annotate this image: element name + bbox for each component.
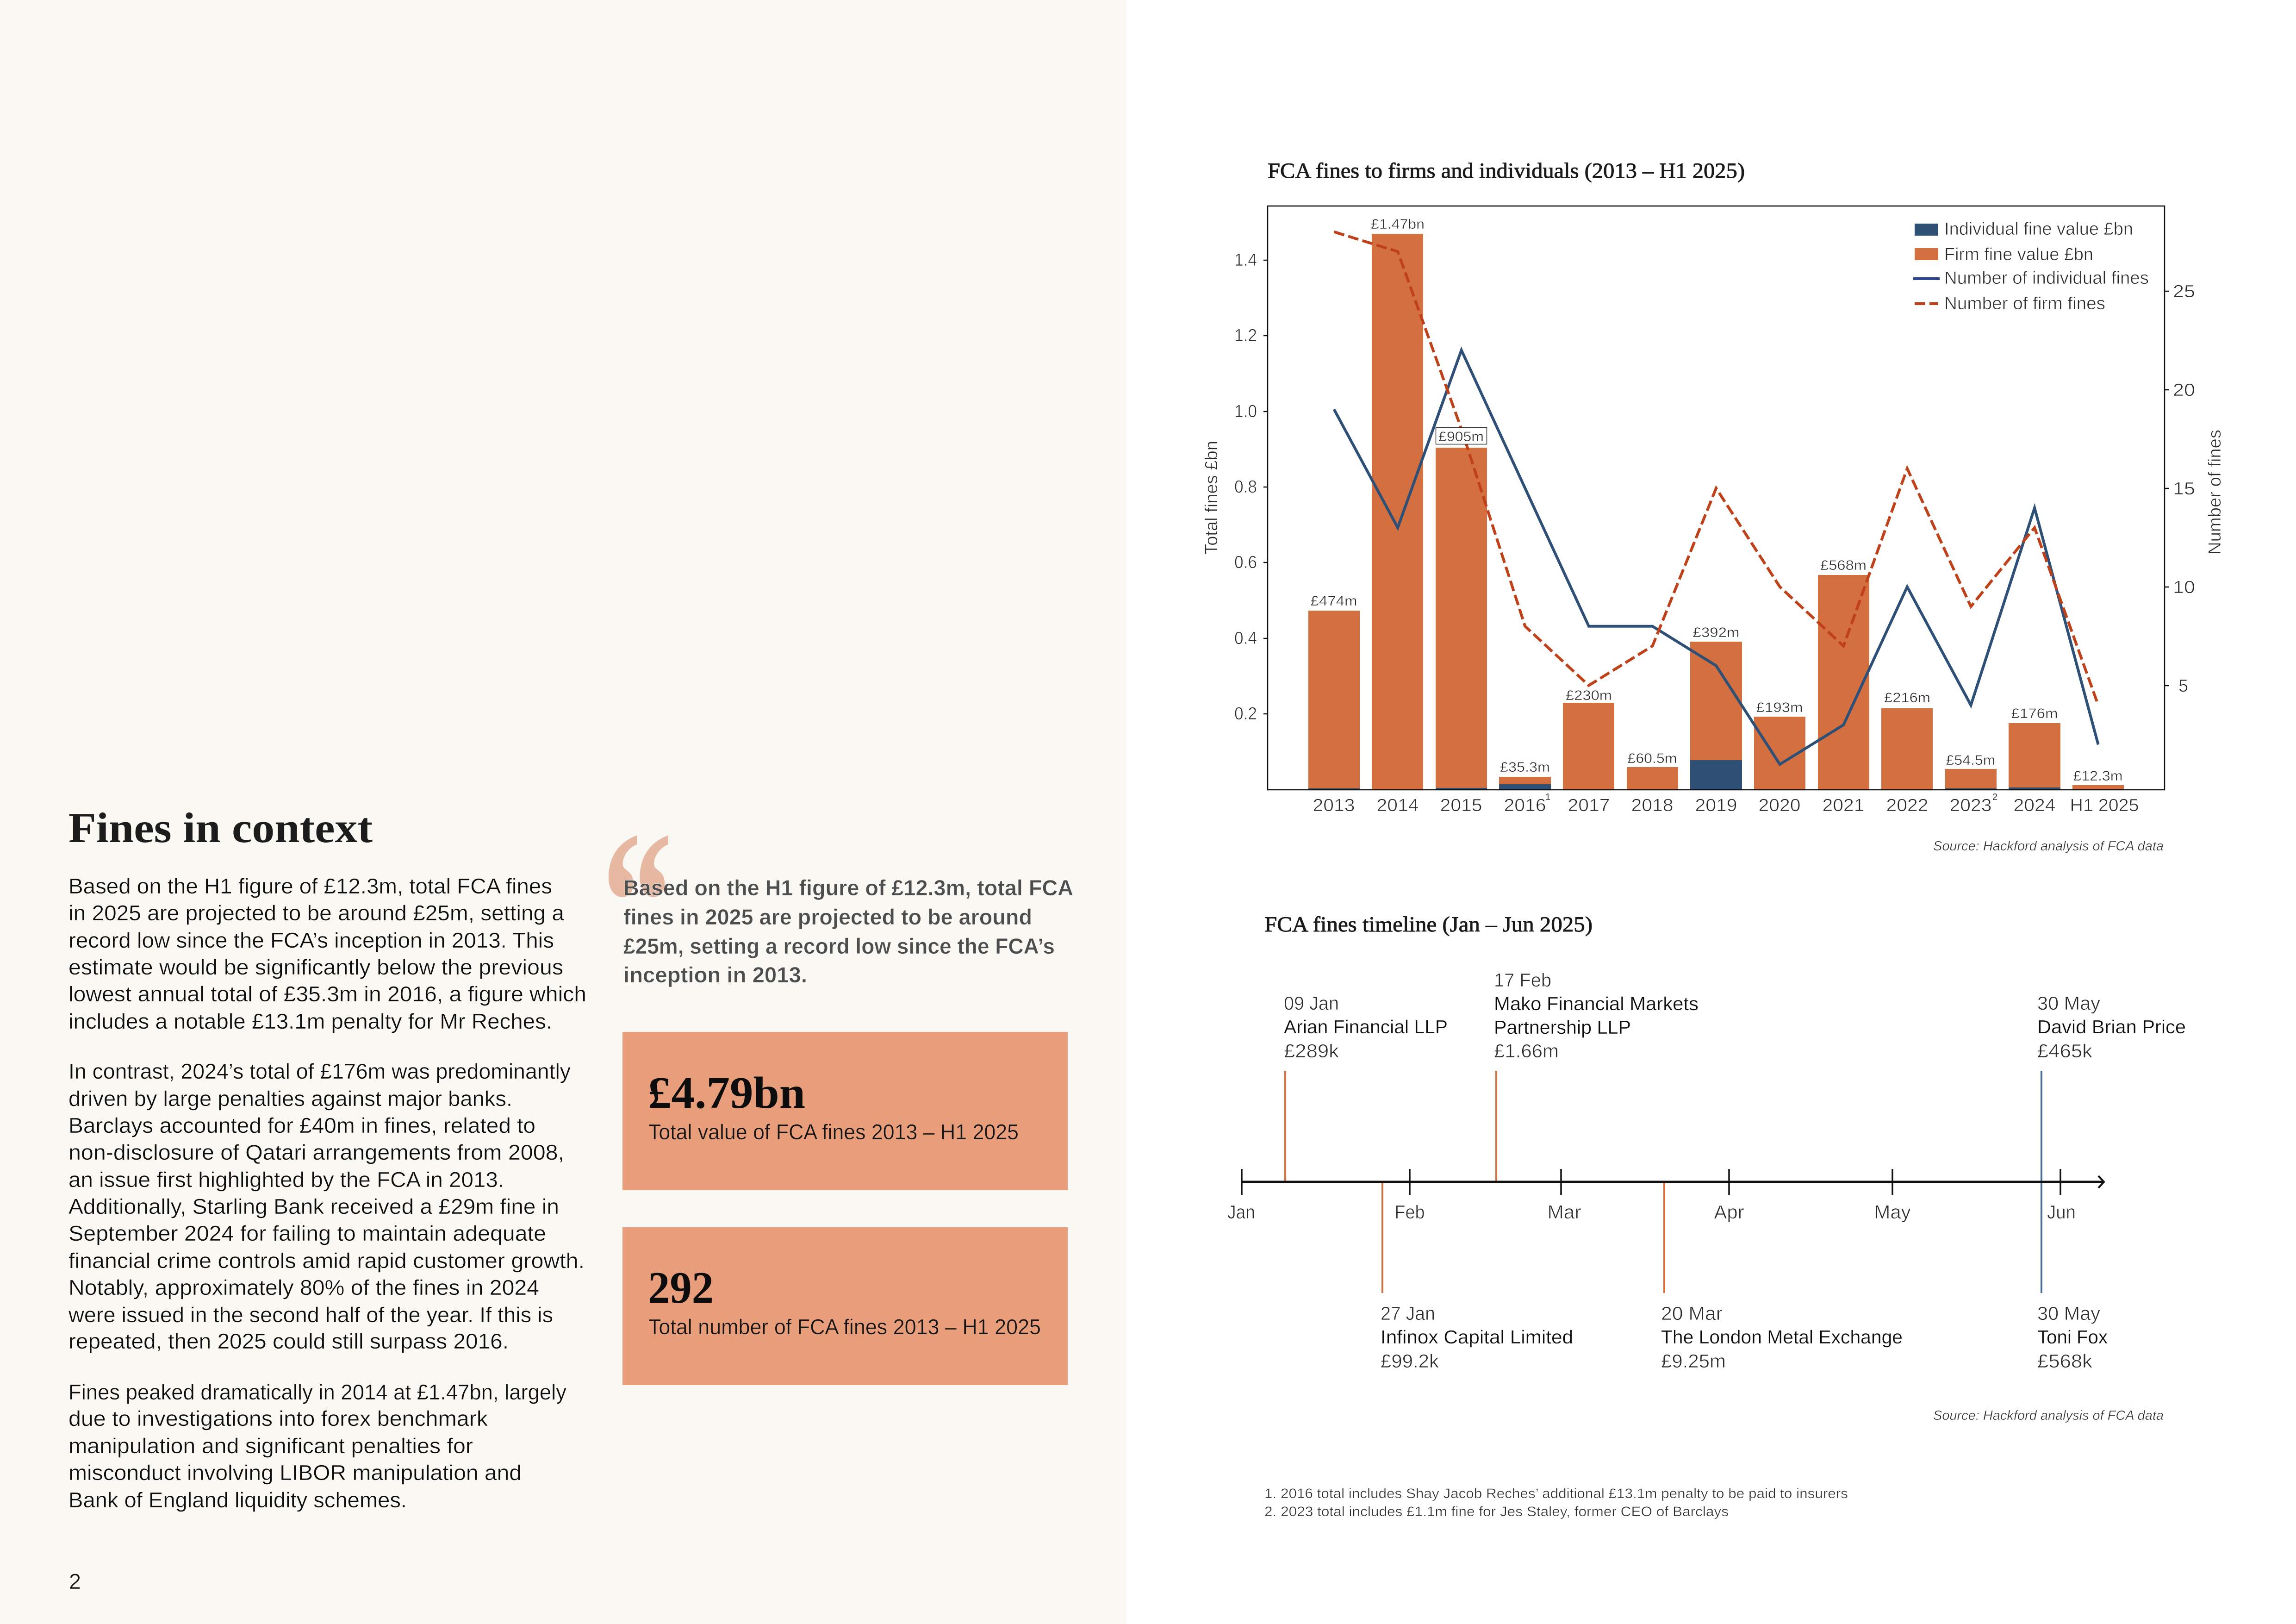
event: The London Metal Exchange: £9.25m bbox=[1661, 1350, 1726, 1372]
bar value labels: £176m bbox=[2011, 706, 2058, 721]
paragraph 2: driven by large penalties against major banks. bbox=[68, 1087, 512, 1111]
right axis labels bbox=[2173, 282, 2195, 696]
timeline chart bbox=[1227, 969, 2186, 1372]
bar value labels: £60.5m bbox=[1627, 751, 1677, 766]
left axis labels: 0.8 bbox=[1234, 477, 1257, 497]
bar value labels: £12.3m bbox=[2073, 768, 2122, 784]
bar value labels bbox=[1311, 217, 2122, 784]
stat box: total value: Total value of FCA fines 2013 – H1 2025 bbox=[648, 1120, 1019, 1144]
chart source: Source: Hackford analysis of FCA data bbox=[1933, 839, 2164, 854]
event: The London Metal Exchange: 20 Mar bbox=[1661, 1303, 1723, 1324]
event: Infinox Capital Limited: 27 Jan bbox=[1381, 1303, 1435, 1324]
footnotes: 1. 2016 total includes Shay Jacob Reches’ additional £13.1m penalty to be paid to insurers bbox=[1264, 1486, 1848, 1501]
event: The London Metal Exchange bbox=[1661, 1303, 1903, 1372]
left axis labels: 0.2 bbox=[1234, 704, 1257, 724]
paragraph 2: Notably, approximately 80% of the fines in 2024 bbox=[68, 1275, 539, 1299]
month labels bbox=[1227, 1201, 2076, 1223]
individual fine bars bbox=[1308, 760, 2060, 790]
paragraph 2: financial crime controls amid rapid customer growth. bbox=[68, 1249, 585, 1273]
event: Arian Financial LLP: 09 Jan bbox=[1284, 993, 1339, 1014]
pull quote text: £25m, setting a record low since the FCA’s bbox=[623, 934, 1055, 958]
paragraph 2: were issued in the second half of the year. If this is bbox=[68, 1303, 553, 1327]
pull quote text: fines in 2025 are projected to be around bbox=[623, 905, 1032, 929]
paragraph 2: an issue first highlighted by the FCA in 2013. bbox=[68, 1168, 504, 1192]
event: Toni Fox: £568k bbox=[2037, 1350, 2093, 1372]
event: David Brian Price: £465k bbox=[2037, 1040, 2093, 1062]
left axis labels: 1.4 bbox=[1234, 250, 1257, 270]
left axis title: Total fines £bn bbox=[1202, 441, 1221, 555]
event: Infinox Capital Limited bbox=[1381, 1303, 1573, 1372]
x axis labels: 2022 bbox=[1886, 796, 1928, 815]
pull quote bbox=[602, 790, 1073, 1016]
paragraph 3: Fines peaked dramatically in 2014 at £1.47bn, largely bbox=[68, 1380, 566, 1404]
paragraph 2: September 2024 for failing to maintain adequate bbox=[68, 1221, 546, 1245]
month labels: Feb bbox=[1395, 1201, 1425, 1223]
x axis labels: 2020 bbox=[1759, 796, 1800, 815]
event: Toni Fox: Toni Fox bbox=[2037, 1326, 2108, 1348]
pull quote text: Based on the H1 figure of £12.3m, total FCA bbox=[623, 875, 1073, 900]
chart frame and ticks bbox=[1263, 206, 2169, 790]
event: Mako Financial Markets Partnership LLP: £1.66m bbox=[1494, 1040, 1559, 1062]
month labels: May bbox=[1874, 1201, 1911, 1223]
pull quote text: inception in 2013. bbox=[623, 962, 807, 987]
paragraph 2: Additionally, Starling Bank received a £29m fine in bbox=[68, 1194, 559, 1218]
x axis labels bbox=[1313, 796, 2139, 815]
footnotes bbox=[1264, 1486, 1848, 1519]
bar value labels: £230m bbox=[1566, 688, 1612, 703]
left axis labels bbox=[1234, 250, 1257, 724]
paragraph 2: non-disclosure of Qatari arrangements from 2008, bbox=[68, 1140, 564, 1164]
paragraph 3: manipulation and significant penalties for bbox=[68, 1434, 473, 1458]
paragraph 2: In contrast, 2024’s total of £176m was predominantly bbox=[68, 1059, 571, 1083]
paragraph 1: estimate would be significantly below the previous bbox=[68, 955, 563, 979]
stat box: total number: 292 bbox=[648, 1263, 714, 1313]
x axis labels: 2018 bbox=[1631, 796, 1674, 815]
bar value labels: £216m bbox=[1884, 690, 1930, 706]
event: Arian Financial LLP: £289k bbox=[1284, 1040, 1339, 1062]
bar value labels: £474m bbox=[1311, 593, 1357, 609]
paragraph 3: due to investigations into forex benchmark bbox=[68, 1406, 488, 1430]
bar value labels: £1.47bn bbox=[1371, 217, 1425, 232]
pull quote text bbox=[623, 875, 1073, 987]
right axis labels: 10 bbox=[2173, 578, 2195, 597]
paragraph 1: in 2025 are projected to be around £25m, setting a bbox=[68, 901, 564, 925]
x axis labels: 2024 bbox=[2013, 796, 2056, 815]
bar value labels: £905m bbox=[1438, 429, 1484, 444]
event: The London Metal Exchange: The London Metal Exchange bbox=[1661, 1326, 1903, 1348]
event connector lines bbox=[1285, 1071, 2041, 1293]
left axis labels: 0.6 bbox=[1234, 553, 1257, 572]
line: number of firm fines bbox=[1334, 232, 2098, 705]
heading: Fines in context: Fines in context bbox=[68, 804, 373, 851]
paragraph 1: includes a notable £13.1m penalty for Mr Reches. bbox=[68, 1009, 552, 1033]
body text bbox=[68, 874, 586, 1512]
x axis labels: 2023 bbox=[1949, 796, 1992, 815]
stat box: total number bbox=[622, 1227, 1068, 1385]
chart title: FCA fines to firms and individuals (2013 – H1 2025) bbox=[1268, 159, 1745, 183]
left axis labels: 1.2 bbox=[1234, 326, 1257, 345]
event: David Brian Price bbox=[2037, 993, 2186, 1062]
event: Infinox Capital Limited: Infinox Capital Limited bbox=[1381, 1326, 1573, 1348]
legend bbox=[1913, 219, 2149, 313]
paragraph 2: repeated, then 2025 could still surpass 2016. bbox=[68, 1329, 509, 1353]
right axis labels: 15 bbox=[2173, 479, 2195, 499]
paragraph 1: record low since the FCA’s inception in 2013. This bbox=[68, 928, 554, 952]
timeline source: Source: Hackford analysis of FCA data bbox=[1933, 1408, 2164, 1423]
legend: Number of firm fines bbox=[1944, 294, 2105, 313]
timeline title: FCA fines timeline (Jan – Jun 2025) bbox=[1264, 912, 1593, 937]
footnotes: 2. 2023 total includes £1.1m fine for Jes Staley, former CEO of Barclays bbox=[1264, 1504, 1729, 1519]
paragraph 1: lowest annual total of £35.3m in 2016, a figure which bbox=[68, 982, 586, 1006]
timeline axis with arrow bbox=[1242, 1169, 2104, 1195]
event: David Brian Price: David Brian Price bbox=[2037, 1016, 2186, 1037]
x axis labels: 2016 bbox=[1504, 796, 1546, 815]
footnote markers: 2 bbox=[1992, 792, 1997, 802]
bar value labels: £35.3m bbox=[1500, 760, 1550, 775]
stat box: total value bbox=[622, 1032, 1068, 1190]
legend: Number of individual fines bbox=[1944, 269, 2149, 288]
icon: quotation mark: “ bbox=[602, 790, 673, 1016]
event: Mako Financial Markets Partnership LLP: 17 Feb bbox=[1494, 969, 1551, 991]
firm fine bars bbox=[1308, 234, 2124, 790]
paragraph 1 bbox=[68, 874, 586, 1033]
stat box: total number: Total number of FCA fines 2013 – H1 2025 bbox=[648, 1315, 1041, 1339]
paragraph 3: misconduct involving LIBOR manipulation and bbox=[68, 1461, 522, 1485]
legend: Individual fine value £bn bbox=[1944, 219, 2133, 239]
paragraph 3: Bank of England liquidity schemes. bbox=[68, 1488, 407, 1512]
x axis labels: 2017 bbox=[1568, 796, 1610, 815]
x axis labels: 2015 bbox=[1440, 796, 1482, 815]
paragraph 2 bbox=[68, 1059, 585, 1353]
right axis title: Number of fines bbox=[2205, 430, 2225, 555]
bar value labels: £54.5m bbox=[1946, 753, 1996, 768]
stat box: total value: £4.79bn bbox=[648, 1068, 805, 1118]
event: David Brian Price: 30 May bbox=[2037, 993, 2101, 1014]
event: Arian Financial LLP bbox=[1284, 993, 1448, 1062]
right axis labels: 5 bbox=[2178, 676, 2188, 696]
paragraph 2: Barclays accounted for £40m in fines, related to bbox=[68, 1113, 535, 1137]
legend: Firm fine value £bn bbox=[1944, 245, 2093, 264]
paragraph 1: Based on the H1 figure of £12.3m, total FCA fines bbox=[68, 874, 552, 898]
line: number of individual fines bbox=[1334, 350, 2098, 764]
event: Mako Financial Markets Partnership LLP: Partnership LLP bbox=[1494, 1017, 1631, 1038]
x axis labels: H1 2025 bbox=[2070, 796, 2139, 815]
page number: 2 bbox=[69, 1569, 81, 1593]
bar value labels: £568m bbox=[1820, 558, 1867, 573]
right axis labels: 25 bbox=[2173, 282, 2195, 301]
month labels: Apr bbox=[1714, 1201, 1744, 1223]
event: Mako Financial Markets Partnership LLP bbox=[1494, 969, 1699, 1062]
event: Toni Fox: 30 May bbox=[2037, 1303, 2101, 1324]
left panel background bbox=[0, 0, 1126, 1624]
left axis labels: 1.0 bbox=[1234, 402, 1257, 421]
event: Infinox Capital Limited: £99.2k bbox=[1381, 1350, 1439, 1372]
month labels: Jun bbox=[2047, 1201, 2076, 1223]
event: Toni Fox bbox=[2037, 1303, 2108, 1372]
month labels: Jan bbox=[1227, 1201, 1255, 1223]
right axis labels: 20 bbox=[2173, 381, 2195, 400]
bar value labels: £392m bbox=[1693, 625, 1739, 640]
bar value labels: £193m bbox=[1756, 700, 1803, 715]
month labels: Mar bbox=[1548, 1201, 1581, 1223]
x axis labels: 2019 bbox=[1695, 796, 1737, 815]
x axis labels: 2021 bbox=[1823, 796, 1864, 815]
event: Arian Financial LLP: Arian Financial LLP bbox=[1284, 1016, 1448, 1037]
bar and line chart bbox=[1202, 206, 2225, 815]
left axis labels: 0.4 bbox=[1234, 629, 1257, 648]
footnote markers bbox=[1545, 792, 1997, 802]
event: Mako Financial Markets Partnership LLP: Mako Financial Markets bbox=[1494, 993, 1699, 1014]
footnote markers: 1 bbox=[1545, 792, 1550, 802]
x axis labels: 2013 bbox=[1313, 796, 1355, 815]
x axis labels: 2014 bbox=[1376, 796, 1419, 815]
paragraph 3 bbox=[68, 1380, 566, 1512]
